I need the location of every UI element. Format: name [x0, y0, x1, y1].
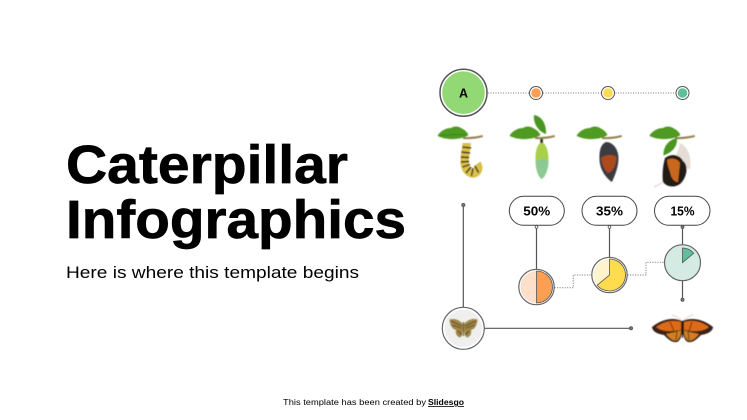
subtitle: Here is where this template begins [66, 263, 359, 282]
title: Caterpillar [66, 135, 348, 195]
illustration: emerging butterfly [649, 126, 695, 187]
connector: 35% to pie [608, 226, 611, 258]
illustration: dark chrysalis [576, 126, 622, 182]
pie chart: 50% [519, 269, 554, 305]
illustration: caterpillar [438, 126, 483, 176]
dotted timeline [488, 92, 676, 94]
percentage pill: 50% [509, 196, 564, 225]
node: green [676, 86, 689, 100]
connector: 15% through pie [681, 226, 684, 301]
node: small butterfly [442, 307, 484, 349]
illustration: green chrysalis [510, 115, 555, 179]
dotted connector: pie 35 to pie 15 [628, 262, 664, 275]
connector: butterfly node up [462, 203, 465, 307]
node: A [440, 69, 487, 116]
connector: 50% to pie [535, 226, 538, 270]
node: orange [530, 86, 542, 100]
illustration: monarch butterfly [652, 315, 713, 342]
node: yellow [602, 86, 614, 100]
title [66, 135, 406, 250]
title: Infographics [66, 190, 406, 250]
percentage pill: 35%: 35% [596, 204, 623, 218]
pie chart: 15% [664, 245, 700, 281]
pie chart: 35% [592, 257, 627, 293]
dotted connector: pie 50 to pie 35 [554, 275, 592, 288]
connector: butterfly node right [484, 327, 633, 330]
footer credit: This template has been created by [283, 398, 426, 407]
percentage pill: 50%: 50% [523, 204, 550, 218]
node: A: A [459, 86, 468, 100]
percentage pill: 15%: 15% [670, 204, 694, 218]
percentage pill: 35% [582, 196, 637, 225]
footer credit: Slidesgo [428, 398, 464, 407]
percentage pill: 15% [654, 196, 710, 225]
